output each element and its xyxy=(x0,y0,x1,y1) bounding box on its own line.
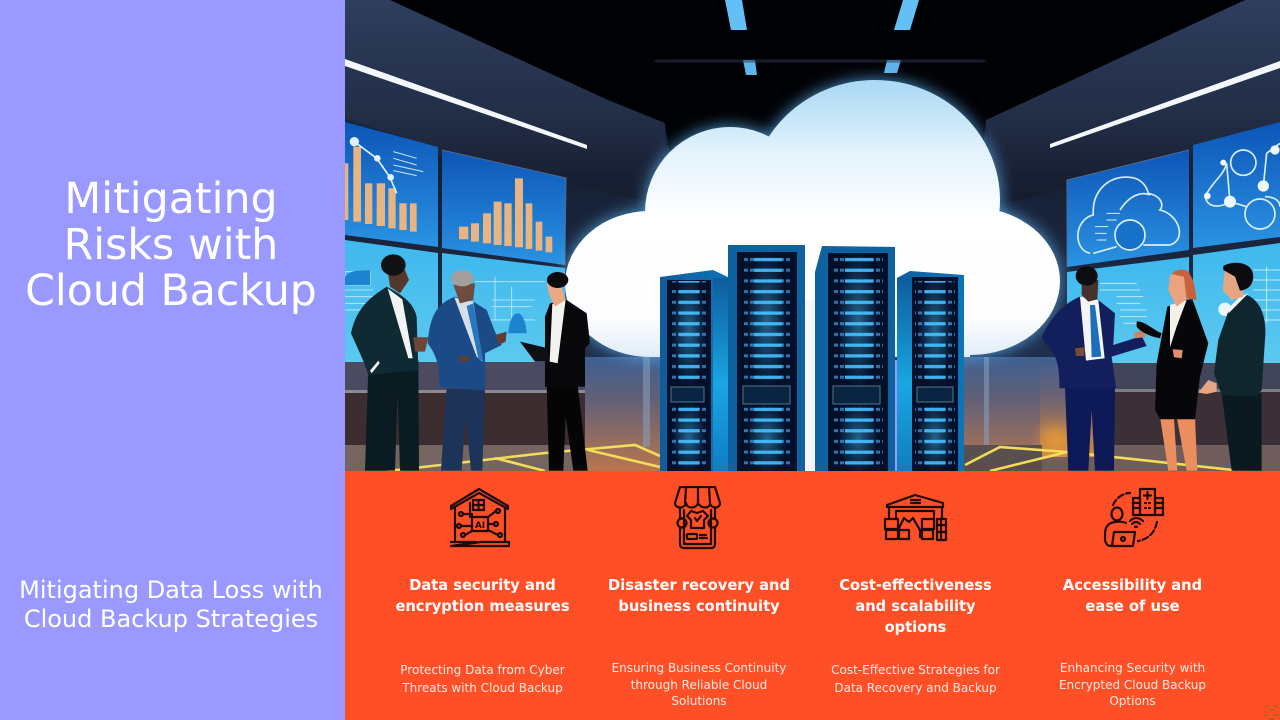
rack 2 xyxy=(728,245,805,474)
description: Ensuring Business Continuity xyxy=(612,661,786,675)
title xyxy=(25,174,317,316)
schematic: lower screen xyxy=(345,270,545,333)
description: through Reliable Cloud xyxy=(631,678,767,692)
column: cost-effectiveness xyxy=(831,494,1000,695)
cloud sketch on screen xyxy=(1078,177,1179,253)
heading xyxy=(1063,577,1202,615)
icon: AI house xyxy=(450,488,510,548)
icon: warehouse xyxy=(884,494,948,542)
heading: business continuity xyxy=(618,598,780,615)
heading: Cost-effectiveness xyxy=(839,577,992,594)
heading: Data security and encryption measures xyxy=(395,577,570,615)
heading: ease of use xyxy=(1085,598,1180,615)
description: Protecting Data from Cyber Threats with Cloud Backup xyxy=(400,663,565,695)
title: Risks with xyxy=(64,220,278,270)
cloud glow xyxy=(565,80,1060,357)
business people: left group xyxy=(351,254,590,471)
person 3 xyxy=(520,272,590,471)
server racks xyxy=(660,245,964,474)
description xyxy=(612,661,786,708)
panel: left sidebar xyxy=(0,0,345,720)
floor light lines xyxy=(388,445,1233,471)
column: accessibility xyxy=(1059,488,1206,708)
rack 4 xyxy=(897,271,964,473)
panel: features xyxy=(345,471,1280,720)
subtitle xyxy=(19,576,323,633)
subtitle: Mitigating Data Loss with xyxy=(19,576,323,604)
bar chart: left screen xyxy=(345,137,423,232)
column: data security xyxy=(395,488,570,695)
wall screens: left xyxy=(345,119,566,362)
heading: and scalability xyxy=(855,598,976,615)
cloud xyxy=(565,80,1060,357)
column: disaster recovery xyxy=(608,486,790,708)
heading xyxy=(839,577,992,636)
bottom corner marks xyxy=(1264,705,1279,720)
ceiling light strip: right xyxy=(1050,61,1280,148)
heading: options xyxy=(885,619,946,636)
ceiling xyxy=(345,0,1280,365)
bar chart: centre screen xyxy=(459,178,552,252)
gap between server racks xyxy=(800,300,820,471)
person 6 xyxy=(1198,263,1265,471)
wall screens: right xyxy=(1067,122,1280,363)
person 2 xyxy=(428,270,507,471)
heading xyxy=(608,577,790,615)
person 4 xyxy=(1042,266,1147,471)
person 5 xyxy=(1137,270,1208,471)
cloud body xyxy=(565,80,1060,357)
network diagram on screen xyxy=(1204,143,1280,229)
person 1 xyxy=(351,254,428,471)
description: Enhancing Security with Encrypted Cloud Backup Options xyxy=(1059,661,1206,708)
icon: AI house: AI xyxy=(475,521,485,531)
heading: Disaster recovery and xyxy=(608,577,790,594)
icon: remote user and hospital xyxy=(1104,488,1164,548)
business people: right group xyxy=(1042,263,1265,471)
rack 3 xyxy=(815,246,895,474)
lower wall: right xyxy=(962,357,1280,471)
icon: shop on phone xyxy=(674,486,722,550)
description: Cost-Effective Strategies for Data Recovery and Backup xyxy=(831,663,1000,695)
subtitle: Cloud Backup Strategies xyxy=(24,605,318,633)
data table on screen xyxy=(1100,267,1280,323)
description: Solutions xyxy=(671,694,727,708)
heading: Accessibility and xyxy=(1063,577,1202,594)
title: Cloud Backup xyxy=(25,266,317,316)
lower wall: left xyxy=(345,357,660,471)
illustration: cloud data centre with business people xyxy=(345,0,1280,471)
title: Mitigating xyxy=(64,174,278,224)
rack 1 xyxy=(660,270,730,473)
ceiling light strip: left xyxy=(345,59,587,149)
